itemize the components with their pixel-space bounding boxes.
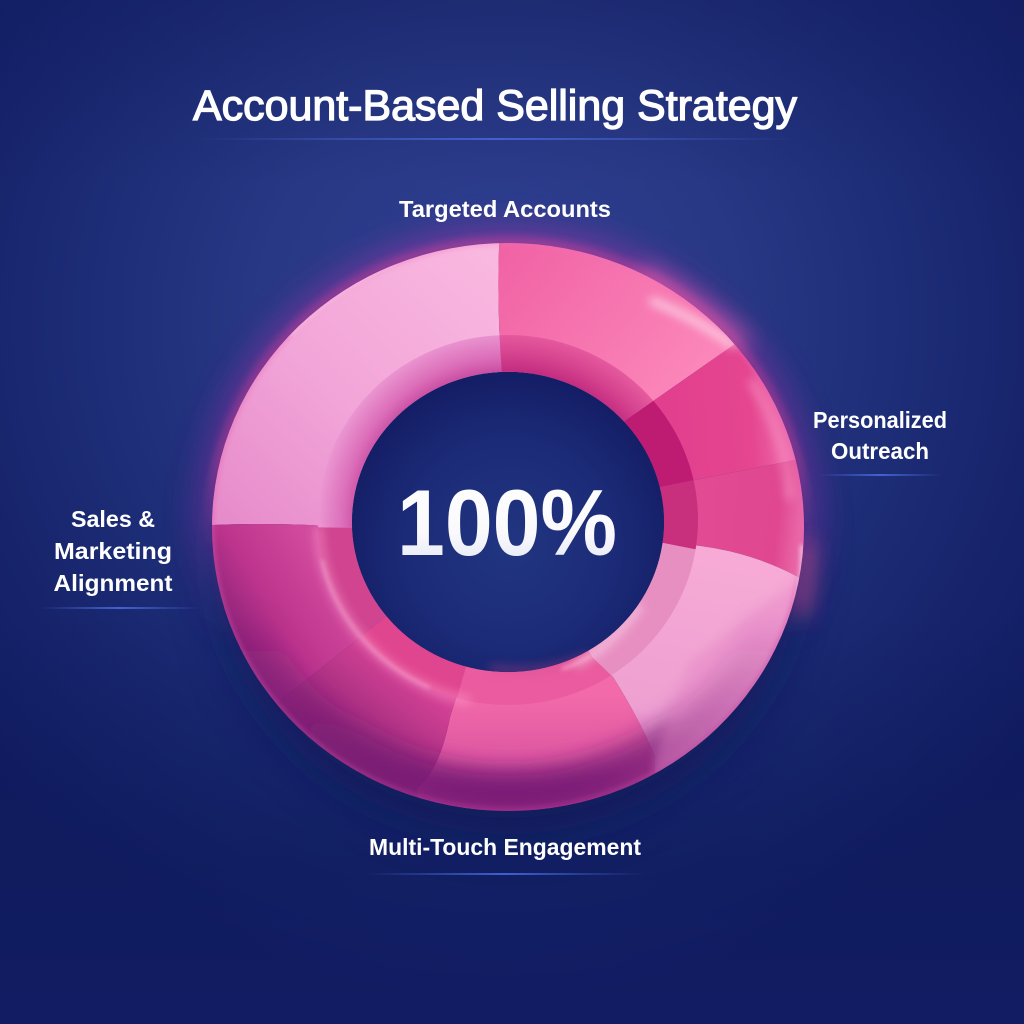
segment: Multi-Touch Engagement xyxy=(417,650,656,811)
donut chart xyxy=(212,243,804,811)
segment: Personalized Outreach upper xyxy=(624,344,796,487)
label: Targeted Accounts: Targeted Accounts xyxy=(399,196,611,222)
specular highlight upper right xyxy=(650,300,735,346)
segment: Sales and Marketing Alignment xyxy=(212,524,387,706)
ring drop shadow and glow xyxy=(210,241,806,834)
label: Personalized Outreach xyxy=(813,407,947,476)
label: Sales and Marketing Alignment: Alignment xyxy=(54,570,173,596)
label: Multi-Touch Engagement: Multi-Touch Engagement xyxy=(369,834,641,860)
title: Account-Based Selling Strategy xyxy=(193,82,797,130)
band edge highlight lower-left wide xyxy=(318,525,470,701)
inner glow lower-right xyxy=(575,605,640,665)
label: Sales and Marketing Alignment: Sales & xyxy=(71,506,155,532)
specular highlight lower-right xyxy=(797,545,802,605)
segment: Personalized Outreach lower xyxy=(660,460,804,578)
outer rim light xyxy=(212,243,804,811)
centre value: 100% xyxy=(397,470,617,575)
specular highlight upper-left rim xyxy=(290,262,395,335)
label: Personalized Outreach: Personalized xyxy=(813,407,947,433)
bottom shading xyxy=(257,628,779,811)
segment: top-left light pink xyxy=(212,243,502,528)
label: Sales and Marketing Alignment: Marketing xyxy=(54,538,172,564)
label: Sales and Marketing Alignment xyxy=(40,506,200,609)
segment: Targeted Accounts xyxy=(498,243,734,422)
segment: lower-right light pink xyxy=(588,543,800,774)
lower-right segment tint over shading xyxy=(652,584,796,772)
centre hole xyxy=(352,372,664,672)
label: Personalized Outreach: Outreach xyxy=(831,438,929,464)
specular highlight right side xyxy=(750,380,790,500)
inner tube band xyxy=(318,335,698,705)
segment: lower-left dark xyxy=(278,616,466,798)
band edge highlight lower-left core xyxy=(322,560,430,688)
